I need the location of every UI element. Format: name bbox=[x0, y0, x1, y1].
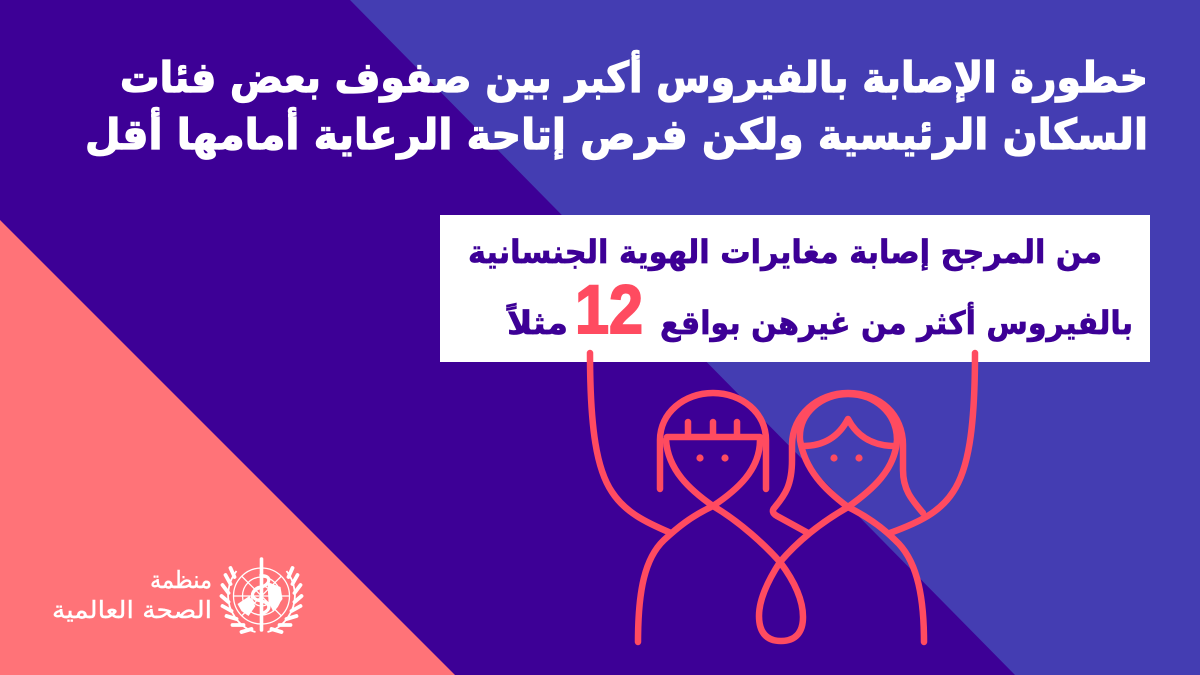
logo text: الصحة العالمية bbox=[52, 596, 212, 624]
title: السكان الرئيسية ولكن فرص إتاحة الرعاية أمامها أقل bbox=[85, 107, 1148, 160]
number 12: 12 bbox=[575, 271, 643, 348]
title: خطورة الإصابة بالفيروس أكبر بين صفوف بعض فئات bbox=[120, 50, 1148, 103]
callout word: مثلاً bbox=[506, 302, 568, 342]
callout text line 2: بالفيروس أكثر من غيرهن بواقع bbox=[660, 302, 1133, 342]
logo text: منظمة bbox=[150, 566, 212, 594]
logo: WHO bbox=[52, 559, 302, 632]
figure: right woman bbox=[773, 353, 975, 642]
callout text line 1: من المرجح إصابة مغايرات الهوية الجنسانية bbox=[468, 233, 1102, 272]
icon: WHO emblem bbox=[222, 559, 302, 632]
panel: callout box bbox=[440, 215, 1150, 362]
illustration: two women with raised arms bbox=[590, 353, 975, 642]
title bbox=[85, 50, 1148, 160]
logo text bbox=[52, 566, 212, 624]
figure: left woman bbox=[590, 353, 848, 642]
